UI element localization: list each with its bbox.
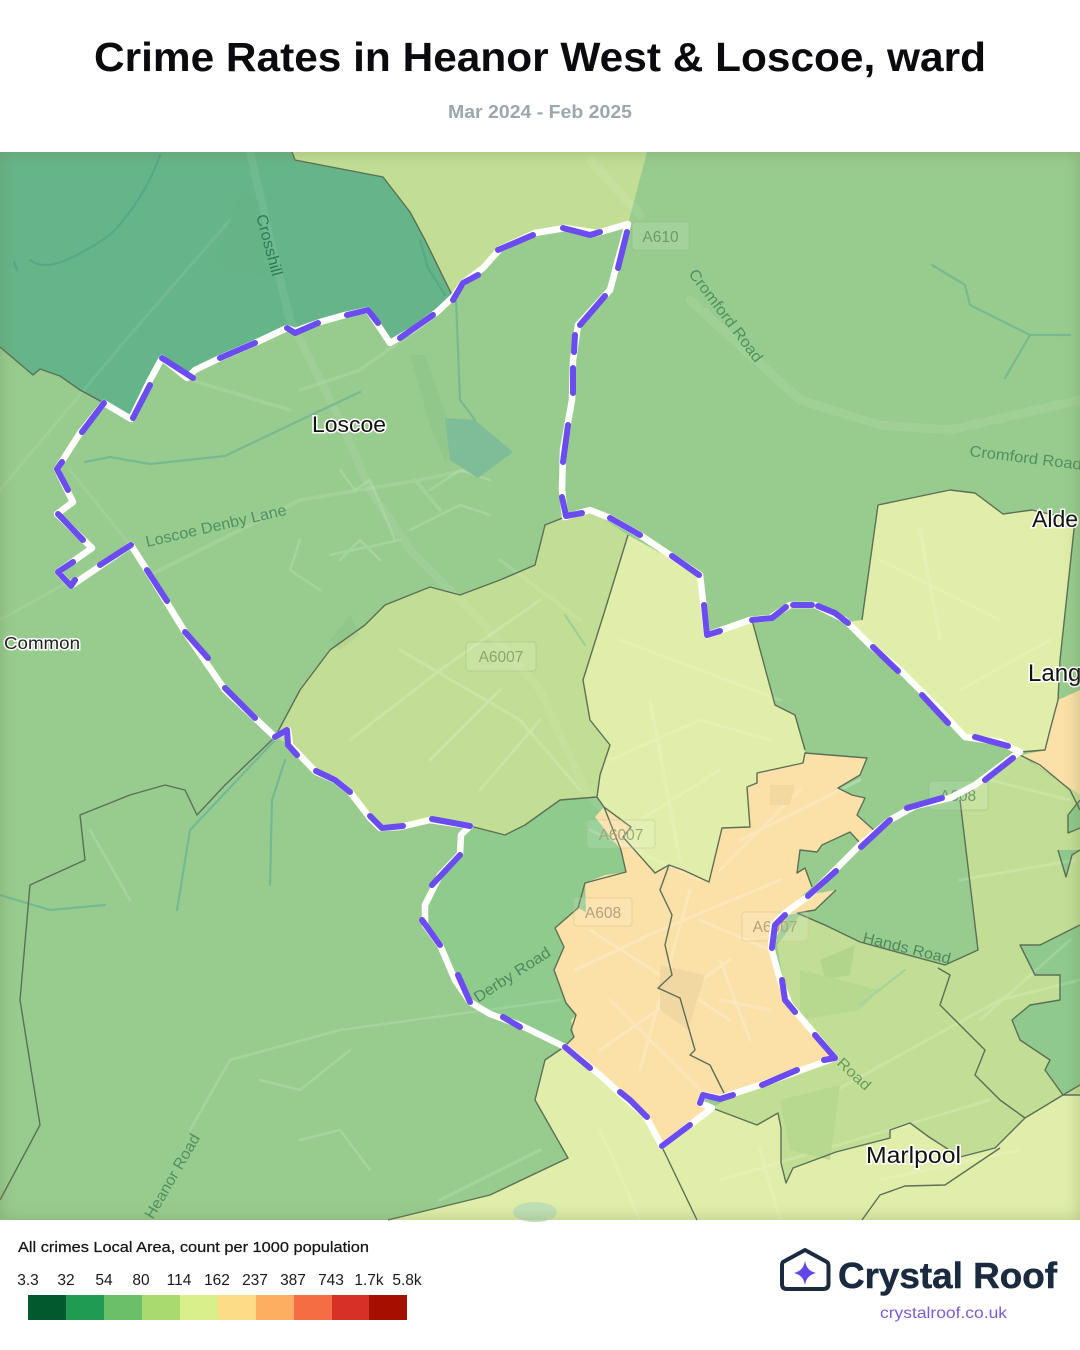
road shield: A6007 north of centre: A6007 [599,827,643,844]
road label: Hands Road: Hands Road [861,929,952,968]
place label: Common: Common [4,633,80,653]
legend scale labels: 32 [57,1272,75,1289]
legend title: All crimes Local Area, count per 1000 population [18,1239,369,1256]
road label: Cromford Road east: Cromford Road [969,443,1080,474]
place label: Marlpool: Marlpool [866,1142,961,1168]
place label: Lang: Lang [1028,660,1080,687]
map details: land patches [215,190,880,1160]
area: northern light green [292,152,647,297]
road shield: A6007 east: A6007 [753,919,797,936]
subtitle: date range: Mar 2024 - Feb 2025 [448,102,632,122]
legend scale labels: 3.3 [17,1272,39,1289]
website link: crystalroof.co.uk [880,1305,1008,1322]
legend scale labels: 5.8k [392,1272,422,1289]
area: south-east light green [712,755,1080,1183]
area: east orange [1022,690,1080,795]
legend scale labels: 80 [132,1272,150,1289]
legend scale labels: 743 [318,1272,344,1289]
legend scale labels: 162 [204,1272,230,1289]
legend colour scale [28,1295,407,1320]
road shield: A608 east [929,781,988,810]
road label: Cromford Road diagonal: Cromford Road [685,266,766,366]
area: central pale yellow-green [583,535,805,882]
map edge vignette [0,152,1080,1220]
brand logo [782,1250,1058,1322]
ward outline purple dashes [57,228,1013,1146]
road shield: A608 east: A608 [940,788,976,805]
icon: house with star [782,1250,828,1289]
title: Crime Rates in Heanor West & Loscoe, ward [94,34,986,80]
area: darkest green north-west [0,152,453,419]
road shield: A610: A610 [642,229,679,246]
ward outline casing [57,224,1020,1146]
map details: roads [0,152,1080,1220]
pond [513,1202,557,1222]
area: east pale yellow-green [848,490,1075,752]
road shield: A6007 north of centre [587,820,655,848]
road label: Crosshill: Crosshill [252,213,285,278]
road shield: A6007 central [466,642,536,671]
legend scale labels: 237 [242,1272,268,1289]
area: south-west green [425,797,626,1047]
streams [0,155,1070,1005]
road shield: A610 [632,222,689,250]
area: small eastern darker green patches [1012,800,1080,1095]
map [0,152,1080,1222]
map base: green neighbourhoods [0,152,1080,1220]
road shield: A608 west: A608 [585,905,621,922]
legend scale labels: 1.7k [354,1272,384,1289]
area: south pale yellow-green [388,1047,1080,1220]
road shield: A6007 central: A6007 [479,649,523,666]
road shield: A6007 east [742,912,808,941]
road shield: A608 west [574,898,632,926]
place label: Loscoe: Loscoe [312,412,386,437]
legend scale labels: 54 [95,1272,113,1289]
legend [17,1239,422,1320]
lake [445,418,513,478]
road label: Road: Road [833,1054,874,1094]
legend scale labels [17,1272,422,1289]
ward boundary: white casing with purple dashes [57,224,1020,1146]
wordmark: Crystal Roof: Crystal Roof [838,1255,1058,1296]
road label: Derby Road: Derby Road [471,944,554,1006]
area: central light green [275,510,628,835]
road label: Loscoe Denby Lane: Loscoe Denby Lane [144,502,288,551]
legend scale labels: 387 [280,1272,306,1289]
neighbourhood boundary lines [0,152,1080,1220]
place label: Alde: Alde [1032,506,1078,532]
area: highest-crime orange core [554,753,876,1147]
legend scale labels: 114 [167,1272,192,1289]
road label: Heanor Road: Heanor Road [142,1131,204,1222]
